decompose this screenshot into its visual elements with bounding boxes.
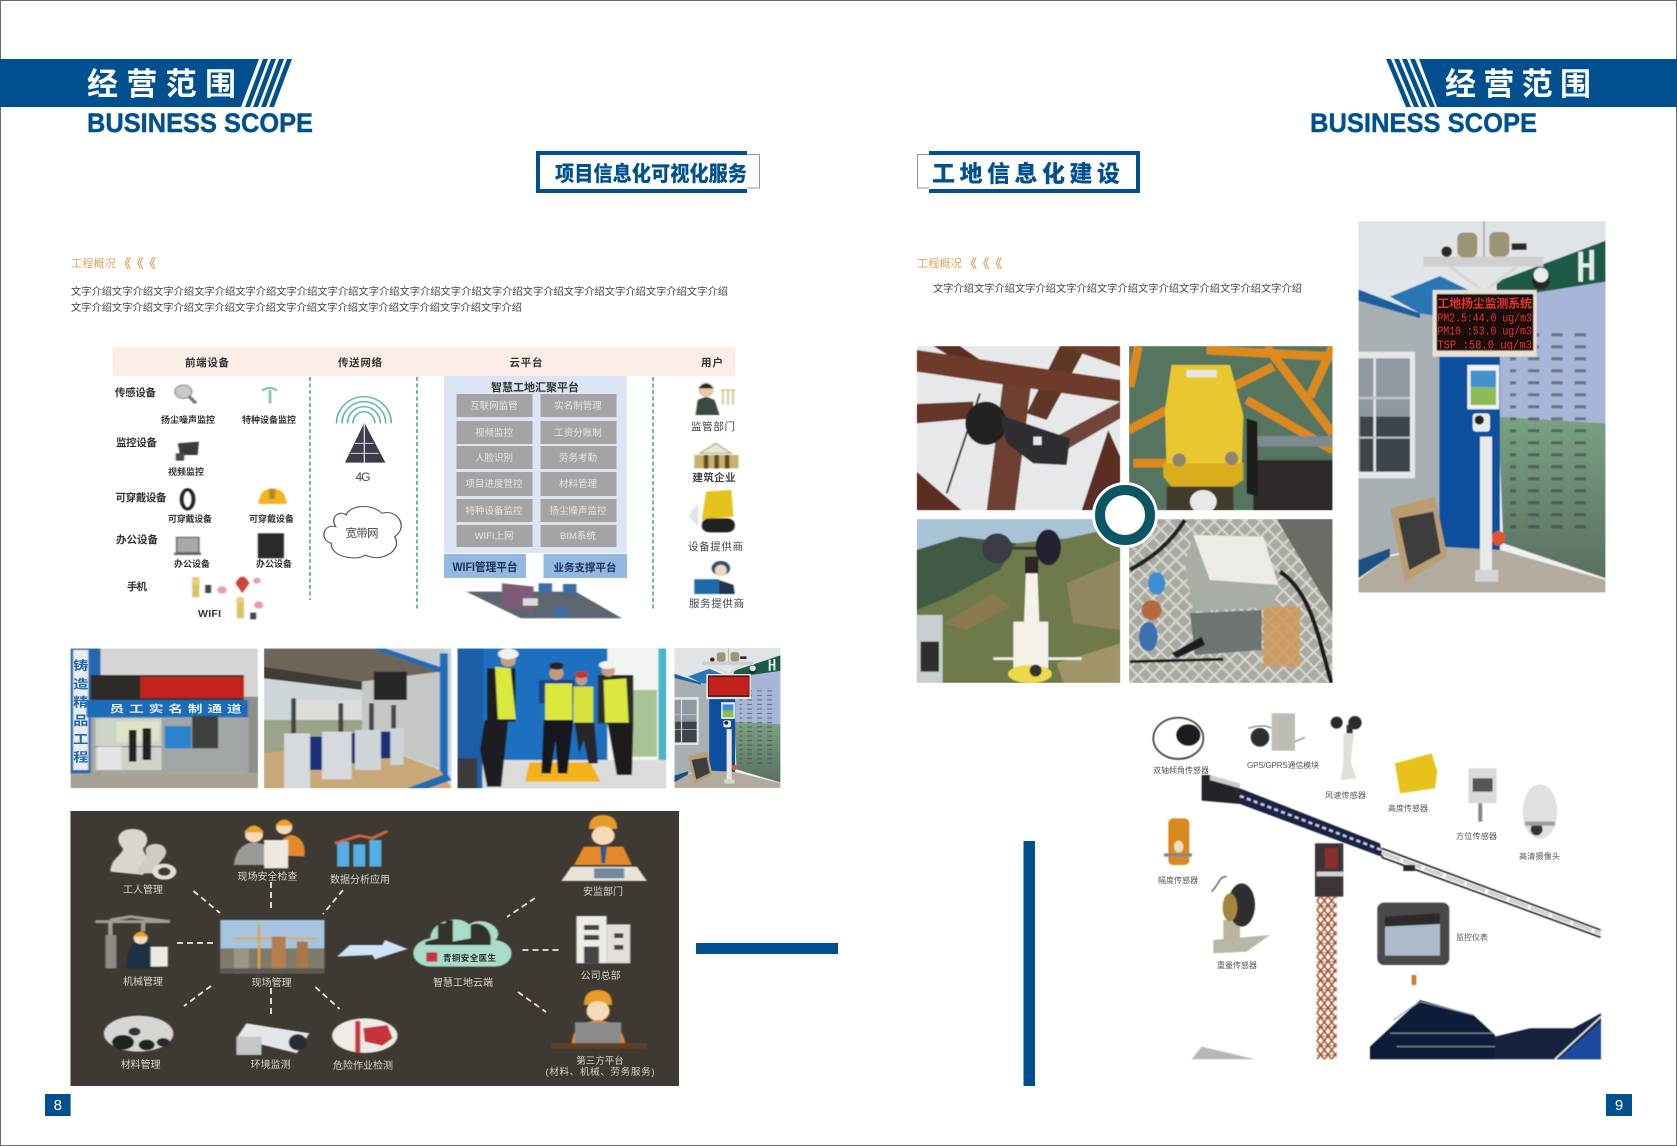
platform module grid: 人脸识别	[475, 452, 513, 464]
panel labels: 现场安全检查	[238, 870, 298, 883]
column: front-end devices: 视频监控	[168, 466, 204, 477]
icon: machinery	[95, 917, 170, 968]
tower crane sensor diagram	[1153, 713, 1601, 1059]
column: front-end devices: 传感设备	[115, 386, 156, 399]
right intro text: 文字介绍文字介绍文字介绍文字介绍文字介绍文字介绍文字介绍文字介绍文字介绍	[933, 282, 1302, 295]
diagram header strip: 前端设备	[185, 356, 230, 369]
LED readout: PM10 :53.0 ug/m3	[1437, 325, 1532, 339]
photo: worker real-name channel: 程	[73, 750, 89, 765]
photo: dust monitoring station large	[1358, 221, 1606, 593]
panel labels: 公司总部	[581, 969, 621, 982]
panel labels: 数据分析应用	[330, 873, 390, 886]
icon: third party platform	[551, 990, 647, 1049]
icon: height sensor	[1395, 753, 1437, 793]
crane labels: 幅度传感器	[1158, 875, 1198, 885]
icon: HD camera	[1523, 784, 1557, 839]
photo: worker real-name channel: 造	[73, 677, 89, 692]
crane labels: 监控仪表	[1456, 932, 1488, 942]
panel: smart site cloud diagram	[70, 811, 679, 1086]
crane labels: 重量传感器	[1217, 960, 1257, 970]
right header	[1310, 59, 1677, 138]
column: users: 服务提供商	[689, 597, 744, 610]
platform module grid: 劳务考勤	[559, 452, 597, 464]
photo: wind speed sensor	[917, 519, 1120, 683]
column: cloud platform	[444, 376, 627, 618]
column: front-end devices: 办公设备	[174, 558, 210, 569]
heading: project information visualisation service: 项目信息化可视化服务	[555, 162, 747, 186]
platform module grid: 工资分账制	[554, 427, 602, 439]
column: front-end devices: 办公设备	[116, 533, 158, 546]
platform module grid: 互联网监管	[470, 400, 518, 412]
left header: 经营范围	[87, 67, 236, 102]
left overview label: 工程概况	[71, 257, 116, 270]
heading: project information visualisation service	[536, 151, 760, 193]
panel labels: 工人管理	[123, 883, 163, 896]
diagram header strip: 用户	[701, 356, 723, 369]
column: cloud platform: 业务支撑平台	[554, 561, 616, 574]
crane labels: 高度传感器	[1388, 803, 1428, 813]
left header	[0, 59, 313, 138]
column: front-end devices: 手机	[127, 580, 148, 593]
column: cloud platform: 智慧工地汇聚平台	[491, 380, 579, 394]
panel labels: 机械管理	[123, 975, 163, 988]
platform module grid	[456, 394, 616, 547]
icon: cloud	[413, 919, 512, 967]
right overview label: 工程概况	[917, 257, 962, 270]
left intro text: 文字介绍文字介绍文字介绍文字介绍文字介绍文字介绍文字介绍文字介绍文字介绍文字介绍文字介绍文字介绍文字介绍文字介绍文字介绍文字介绍	[71, 285, 728, 298]
column: front-end devices: 扬尘噪声监控	[161, 414, 215, 425]
column: front-end devices: 特种设备监控	[242, 414, 296, 425]
ring badge between photos	[1092, 482, 1158, 548]
column: front-end devices: 可穿戴设备	[116, 491, 167, 504]
icon: wind sensor	[1331, 716, 1362, 780]
column: users: 设备提供商	[688, 540, 743, 553]
platform module grid: 扬尘噪声监控	[549, 505, 607, 517]
icon: worker management	[110, 829, 173, 878]
left intro text	[71, 285, 728, 314]
icon: site management photo	[220, 920, 324, 973]
platform module grid: 项目进度管控	[465, 478, 523, 490]
photo: worker real-name channel: 品	[73, 714, 88, 728]
photo: worker real-name channel: 精	[73, 694, 88, 710]
crane labels: GPS/GPRS通信模块	[1247, 760, 1319, 770]
column: transmission network: 4G	[356, 470, 370, 484]
photo: dust monitoring station small	[674, 648, 780, 788]
crane labels: 双轴倾角传感器	[1153, 765, 1209, 775]
crane labels: 方位传感器	[1456, 831, 1497, 841]
server platform illustration	[466, 583, 622, 618]
left intro text: 文字介绍文字介绍文字介绍文字介绍文字介绍文字介绍文字介绍文字介绍文字介绍文字介绍文字介绍	[71, 301, 522, 314]
photo: VR safety training	[457, 648, 666, 788]
photo: worker real-name channel: 铸	[73, 659, 89, 673]
icon: amplitude sensor	[1164, 818, 1192, 865]
construction building	[1192, 975, 1601, 1059]
panel labels: (材料、机械、劳务服务)	[546, 1066, 654, 1078]
panel labels: 青铜安全医生	[443, 953, 496, 963]
LED readout: PM2.5:44.0 ug/m3	[1437, 311, 1532, 325]
crane labels: 风速传感器	[1325, 790, 1366, 800]
crane labels: 高清摄像头	[1519, 851, 1560, 861]
left overview label	[71, 256, 156, 271]
panel icons	[95, 815, 647, 1055]
column: front-end devices: WIFI	[198, 608, 221, 620]
LED readout: 工地扬尘监测系统	[1437, 295, 1532, 311]
icon: environmental camera	[236, 1023, 309, 1055]
column: transmission network: 宽带网	[346, 526, 378, 540]
column: users	[688, 383, 744, 610]
column: front-end devices: 可穿戴设备	[168, 513, 212, 524]
column: users: 建筑企业	[692, 471, 736, 484]
platform module grid: BIM系统	[560, 530, 596, 542]
left overview label: 《《《	[118, 256, 156, 271]
panel labels: 第三方平台	[576, 1055, 624, 1067]
column: front-end devices: 可穿戴设备	[249, 513, 294, 524]
right overview label	[917, 256, 1002, 271]
panel labels: 材料管理	[121, 1058, 161, 1071]
photo: worker real-name channel	[70, 648, 258, 788]
photo: yellow height sensor	[1129, 346, 1333, 513]
column: front-end devices: 办公设备	[256, 558, 292, 569]
icon: load sensor	[1212, 877, 1270, 953]
LED readout: TSP :58.0 ug/m3	[1437, 338, 1532, 352]
icon: safety inspection	[234, 819, 305, 868]
crane tower	[1315, 843, 1343, 1059]
heading: site informatisation: 工地信息化建设	[932, 160, 1120, 186]
icon: monitor instrument	[1377, 903, 1449, 965]
diagram header strip	[112, 347, 736, 376]
photo: worker real-name channel: 员工实名制通道	[110, 703, 242, 715]
column: front-end devices	[115, 385, 296, 620]
column: users: 监管部门	[691, 420, 735, 433]
panel labels: 环境监测	[251, 1058, 291, 1071]
platform module grid: 材料管理	[559, 478, 597, 490]
platform module grid: 实名制管理	[554, 400, 602, 412]
icon: GPS module	[1248, 713, 1305, 751]
platform module grid: WIFI上网	[474, 531, 514, 542]
icon: arrow	[337, 940, 408, 959]
column: front-end devices: 监控设备	[116, 436, 158, 449]
decorative blue bar left	[696, 943, 838, 954]
crane jib	[1202, 775, 1601, 937]
page number 8	[45, 1094, 71, 1116]
photo: turnstile gates	[264, 648, 452, 788]
page number 8: 8	[54, 1097, 62, 1114]
icon: dual axis tilt sensor	[1153, 718, 1203, 759]
heading: site informatisation	[918, 151, 1140, 193]
architecture diagram	[112, 347, 744, 620]
panel labels: 危险作业检测	[333, 1059, 393, 1072]
photo: direction sensor on grate	[1129, 519, 1333, 683]
panel labels: 安监部门	[583, 885, 623, 898]
icon: company HQ	[576, 916, 630, 963]
right header: 经营范围	[1445, 67, 1591, 102]
icon: hazard detection	[332, 1018, 398, 1053]
right header: BUSINESS SCOPE	[1310, 108, 1537, 138]
photo: worker real-name channel: 工	[73, 733, 88, 747]
platform module grid: 视频监控	[475, 427, 513, 439]
icon: direction sensor	[1468, 768, 1497, 822]
icon: data analytics	[335, 831, 387, 867]
page number 9: 9	[1615, 1097, 1623, 1114]
column: transmission network	[324, 397, 401, 558]
connector dashes	[177, 882, 560, 1017]
decorative blue vertical bar	[1024, 841, 1035, 1086]
column: cloud platform: WIFI管理平台	[452, 560, 518, 574]
LED readout	[1437, 295, 1532, 352]
panel labels: 现场管理	[252, 976, 292, 989]
panel labels	[121, 870, 655, 1078]
right overview label: 《《《	[964, 256, 1002, 271]
device icons	[174, 385, 287, 619]
left header: BUSINESS SCOPE	[87, 108, 313, 138]
icon: safety department	[561, 815, 647, 881]
platform module grid: 特种设备监控	[465, 505, 523, 517]
page number 9	[1606, 1094, 1632, 1116]
photo: inclination sensor	[917, 346, 1120, 510]
panel labels: 智慧工地云端	[433, 976, 493, 989]
icon: materials	[104, 1016, 173, 1052]
crane labels	[1153, 760, 1560, 970]
diagram header strip: 云平台	[510, 356, 542, 369]
diagram header strip: 传送网络	[338, 356, 382, 369]
